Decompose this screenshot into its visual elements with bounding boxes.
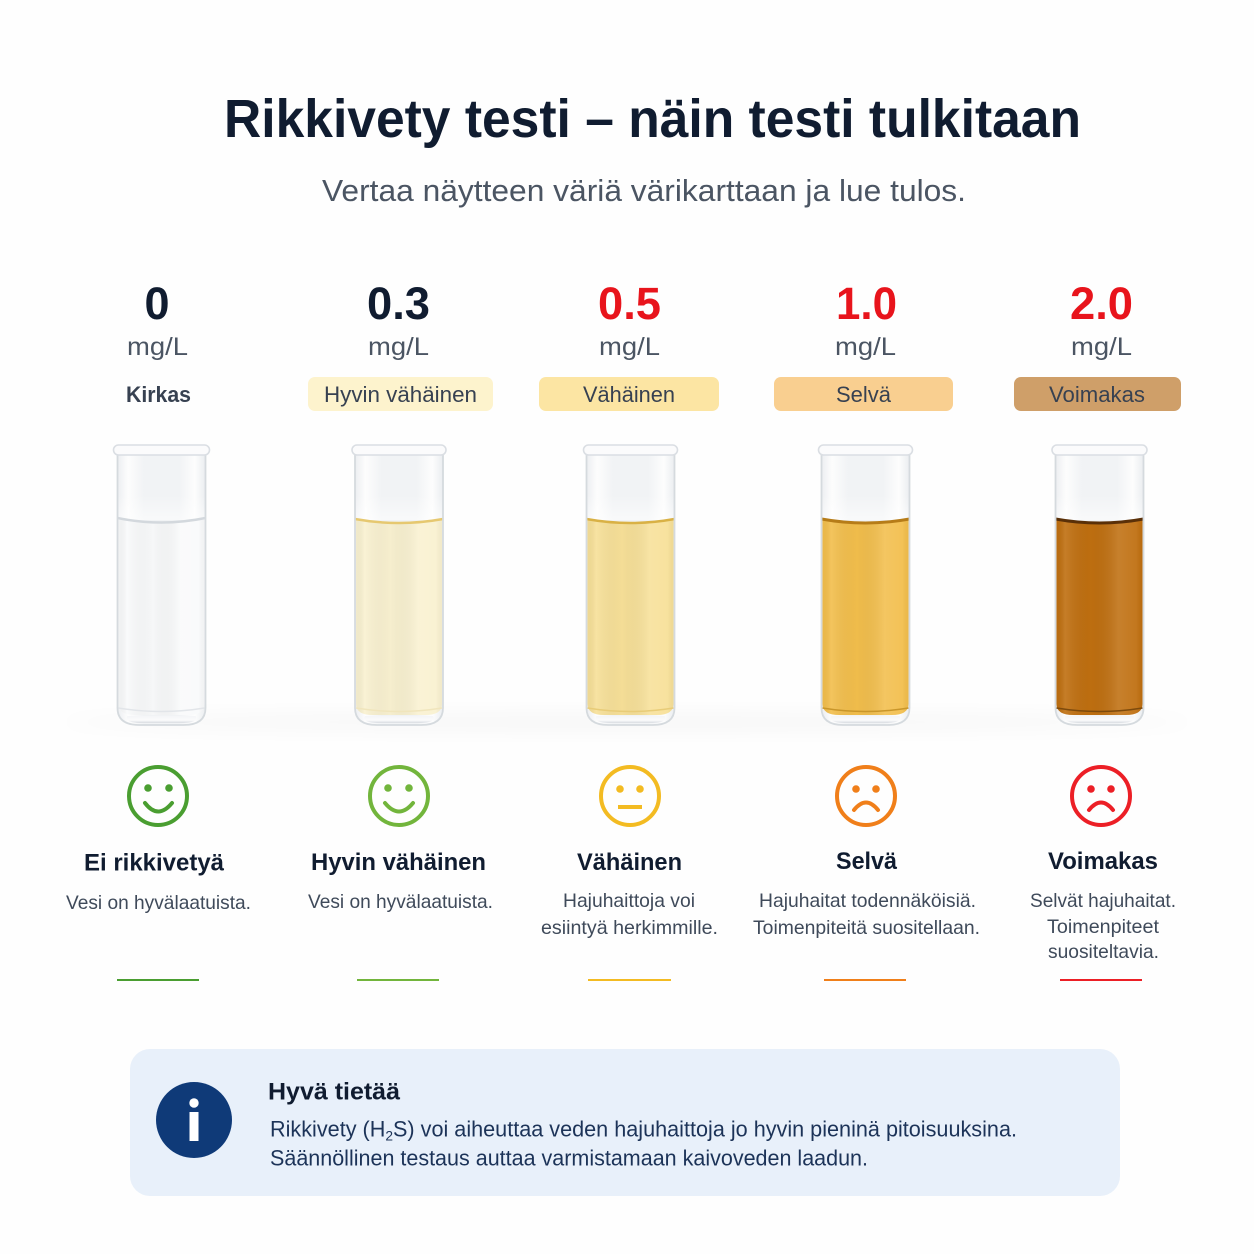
level label: Kirkas <box>126 382 191 407</box>
value: 0 <box>144 278 170 329</box>
info panel <box>130 1049 1120 1196</box>
rule <box>357 979 439 981</box>
panel body text <box>270 1116 1017 1170</box>
smiley: happy <box>129 767 187 825</box>
test tube: amber <box>818 445 912 725</box>
level pill <box>308 377 493 411</box>
smiley: happy <box>370 767 428 825</box>
panel body text: Rikkivety (H <box>270 1116 387 1142</box>
description <box>753 890 980 939</box>
rule <box>824 979 906 981</box>
column 5: 2.0 mg/L <box>1014 278 1181 981</box>
panel body text: 2 <box>385 1128 393 1144</box>
test tube: clear <box>114 445 210 725</box>
name: Hyvin vähäinen <box>311 849 486 876</box>
rule <box>588 979 671 981</box>
description: esiintyä herkimmille. <box>541 917 718 939</box>
smiley: neutral <box>601 767 659 825</box>
value: 0.3 <box>367 278 430 329</box>
level pill <box>774 377 953 411</box>
column 4: 1.0 mg/L <box>753 278 980 981</box>
description: Toimenpiteitä suositellaan. <box>753 917 980 939</box>
shelf shadow <box>57 714 1197 730</box>
column 3: 0.5 mg/L <box>539 278 719 981</box>
rule <box>1060 979 1142 981</box>
level pill <box>539 377 719 411</box>
column 1: 0 mg/L <box>66 278 251 981</box>
unit: mg/L <box>599 333 660 361</box>
level pill: Hyvin vähäinen <box>324 382 477 407</box>
description <box>1030 890 1176 963</box>
panel body text: Säännöllinen testaus auttaa varmistamaan kaivoveden laadun. <box>270 1146 868 1170</box>
unit: mg/L <box>368 333 429 361</box>
unit: mg/L <box>127 333 188 361</box>
test tube: yellow <box>584 445 678 725</box>
panel body text: S) voi aiheuttaa veden hajuhaittoja jo hyvin pieninä pitoisuuksina. <box>393 1116 1017 1142</box>
description: Vesi on hyvälaatuista. <box>66 892 251 914</box>
panel heading: Hyvä tietää <box>268 1078 401 1106</box>
column 2: 0.3 mg/L <box>308 278 493 981</box>
value: 2.0 <box>1070 278 1133 329</box>
description: Selvät hajuhaitat. <box>1030 890 1176 912</box>
icon: info <box>156 1082 232 1158</box>
name: Selvä <box>836 848 898 875</box>
level pill: Selvä <box>836 382 892 407</box>
smiley: very sad <box>1072 767 1130 825</box>
name: Ei rikkivetyä <box>84 850 225 876</box>
unit: mg/L <box>1071 333 1132 361</box>
smiley: sad <box>837 767 895 825</box>
description: suositeltavia. <box>1048 941 1159 963</box>
value: 0.5 <box>598 278 661 329</box>
description: Hajuhaittoja voi <box>563 890 695 912</box>
rule <box>117 979 199 981</box>
name: Voimakas <box>1048 848 1158 875</box>
unit: mg/L <box>835 333 896 361</box>
description <box>541 890 718 939</box>
subtitle: Vertaa näytteen väriä värikarttaan ja lue tulos. <box>322 173 966 208</box>
level pill: Voimakas <box>1049 382 1145 407</box>
description: Hajuhaitat todennäköisiä. <box>759 890 976 912</box>
description: Vesi on hyvälaatuista. <box>308 891 493 913</box>
title: Rikkivety testi – näin testi tulkitaan <box>224 89 1081 149</box>
test tube: dark brown <box>1052 445 1147 725</box>
level pill <box>1014 377 1181 411</box>
value: 1.0 <box>836 278 897 329</box>
level pill: Vähäinen <box>583 382 675 407</box>
test tube: pale yellow <box>352 445 446 725</box>
name: Vähäinen <box>577 849 682 876</box>
description: Toimenpiteet <box>1047 916 1160 938</box>
